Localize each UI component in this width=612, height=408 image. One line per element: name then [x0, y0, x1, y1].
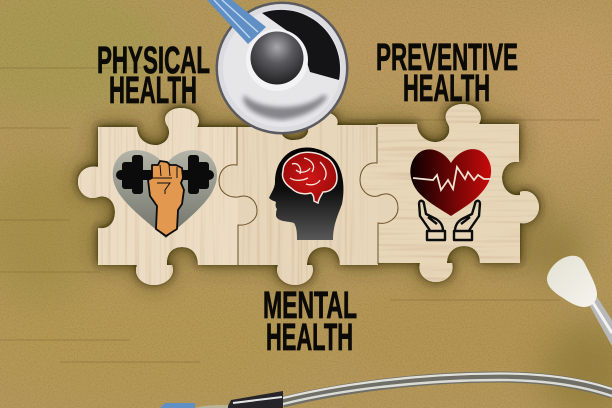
brain: [282, 152, 337, 203]
puzzle pieces: [70, 100, 545, 290]
icon: head with brain: [269, 148, 343, 240]
puzzle piece shadows: [78, 104, 539, 285]
heading: physical health: [97, 40, 210, 112]
stethoscope chest piece: [207, 0, 348, 134]
metal disc: [216, 2, 348, 134]
heading: mental health: [263, 285, 357, 359]
blue tube: [207, 0, 266, 44]
hands: [419, 201, 480, 240]
heading: preventive health: [376, 37, 518, 110]
piece 2 wood: [223, 114, 376, 285]
seams between pieces: [219, 127, 398, 265]
pulse line: [413, 167, 491, 190]
heading: preventive health: HEALTH: [403, 68, 490, 110]
heading: physical health: PHYSICAL: [97, 40, 210, 82]
icon: heart with pulse and caring hands: [410, 149, 491, 240]
fist: [148, 161, 184, 236]
heading: preventive health: PREVENTIVE: [376, 37, 518, 79]
heading: mental health: MENTAL: [263, 285, 357, 327]
heading: physical health: HEALTH: [109, 70, 197, 112]
bell: [246, 29, 308, 91]
piece 1 wood: [78, 108, 238, 285]
stethoscope ear tip: [547, 256, 612, 346]
stethoscope tubing: [160, 374, 612, 408]
dumbbell: [116, 155, 214, 194]
piece 3 wood: [363, 104, 539, 282]
heading: mental health: HEALTH: [266, 317, 353, 359]
icon: heart with dumbbell and fist: [113, 150, 217, 238]
